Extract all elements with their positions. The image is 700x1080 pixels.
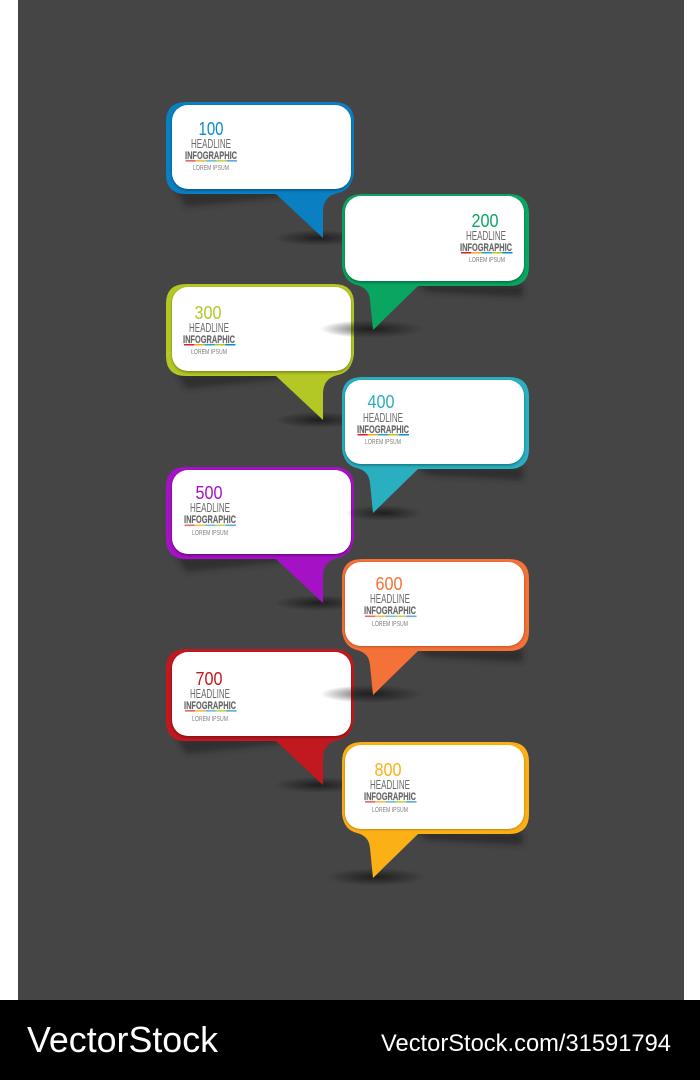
bubble 600: 600 xyxy=(376,574,402,594)
bubble 700: INFOGRAPHIC xyxy=(184,700,236,712)
bubble 800: HEADLINE xyxy=(370,778,410,792)
bubble 200 xyxy=(320,194,529,338)
bubble 700: HEADLINE xyxy=(190,687,230,701)
bubble 600: HEADLINE xyxy=(370,592,410,606)
bubble 500 xyxy=(166,467,362,611)
bubble 800: LOREM IPSUM xyxy=(372,805,408,814)
bubble 400: HEADLINE xyxy=(363,411,403,425)
bubble 300: 300 xyxy=(194,303,222,323)
bubble 100 xyxy=(166,102,362,246)
watermark bar xyxy=(0,1000,700,1080)
bubble 300: INFOGRAPHIC xyxy=(183,334,235,346)
bubble 400: 400 xyxy=(368,392,394,412)
bubble 800: 800 xyxy=(374,760,402,780)
bubble 200: 200 xyxy=(472,211,498,231)
bubble 400: LOREM IPSUM xyxy=(365,437,401,446)
bubble 600: INFOGRAPHIC xyxy=(364,605,416,617)
watermark url: VectorStock.com/31591794 xyxy=(381,1030,671,1057)
bubble 400 xyxy=(342,377,529,521)
bubble 200: LOREM IPSUM xyxy=(469,255,505,264)
bubble 800: INFOGRAPHIC xyxy=(364,791,416,803)
bubble 100: INFOGRAPHIC xyxy=(185,150,237,162)
bubble 700 xyxy=(166,649,362,793)
bubble 200: HEADLINE xyxy=(466,229,506,243)
bubble 100: HEADLINE xyxy=(191,137,231,151)
bubble 300: LOREM IPSUM xyxy=(191,347,227,356)
bubble 100: LOREM IPSUM xyxy=(193,163,229,172)
bubble 500: HEADLINE xyxy=(190,501,230,515)
bubble 700: LOREM IPSUM xyxy=(192,714,228,723)
bubble 200: INFOGRAPHIC xyxy=(460,242,512,254)
bubble 600: LOREM IPSUM xyxy=(372,619,408,628)
bubble 400: INFOGRAPHIC xyxy=(357,424,409,436)
bubble 500: INFOGRAPHIC xyxy=(184,514,236,526)
bubble 500: LOREM IPSUM xyxy=(192,528,228,537)
bubble 300 xyxy=(166,284,362,428)
bubble 100: 100 xyxy=(198,119,224,139)
bubble 500: 500 xyxy=(196,483,222,503)
bubble 700: 700 xyxy=(196,669,222,689)
bubble 300: HEADLINE xyxy=(189,321,229,335)
watermark logo: VectorStock xyxy=(27,1019,219,1060)
bubble 600 xyxy=(320,559,529,703)
bubble 800 xyxy=(326,742,529,886)
